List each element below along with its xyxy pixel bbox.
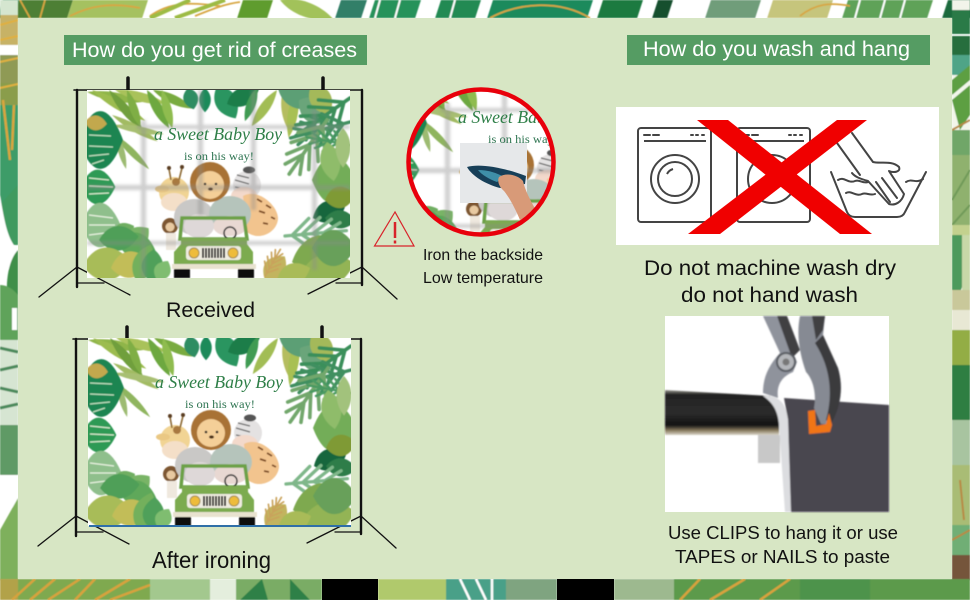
ironing circle close-up: is on his way! [488,134,558,146]
top leaf strip [0,0,970,27]
icon: hand wash basin [831,133,926,217]
washing instructions [644,257,897,307]
cloth backside being ironed [460,143,527,203]
ironing instructions [423,247,543,287]
hanging instructions: Use CLIPS to hang it or use [668,522,898,543]
backdrop on stand: after ironing: is on his way! [185,399,255,411]
white cloth edge [763,396,791,512]
backdrop on stand: received, with creases: is on his way! [184,151,254,163]
icon: warning triangle [374,212,414,246]
washing instructions: do not hand wash [681,284,858,307]
photo: clip holding backdrop on pole [665,316,889,512]
icon: red cross [688,120,872,234]
hand [498,174,537,220]
left leaf strip [0,0,18,580]
ironing circle close-up: a Sweet Baby Boy [458,107,586,127]
ironing instructions: Iron the backside [423,247,543,264]
iron [467,166,526,188]
clamp [763,316,797,398]
right leaf strip [952,0,970,580]
black gap [322,579,378,600]
heading: wash and hang [627,35,930,65]
cloth [784,398,889,512]
backdrop on stand: after ironing [38,318,396,548]
heading: wash and hang: How do you wash and hang [643,38,910,61]
backdrop on stand: after ironing: a Sweet Baby Boy [155,372,283,392]
shadow flap [758,435,780,463]
hanging instructions [668,522,898,567]
caption: received: Received [166,299,255,322]
backdrop on stand: received, with creases [39,70,397,299]
pole [665,390,779,435]
caption: after ironing: After ironing [152,547,271,573]
ironing instructions: Low temperature [423,270,543,287]
icon: washer dryer [737,128,810,222]
icon: washing machine [638,128,711,222]
washing instructions: Do not machine wash dry [644,257,897,280]
heading: creases: How do you get rid of creases [72,38,357,62]
ironing circle close-up [406,87,556,237]
black gap [557,579,614,600]
backdrop on stand: received, with creases: a Sweet Baby Boy [154,124,282,144]
panel: do not wash icons [616,107,939,245]
orange tip [808,410,832,434]
bottom leaf strip [0,579,970,600]
hanging instructions: TAPES or NAILS to paste [675,546,890,567]
